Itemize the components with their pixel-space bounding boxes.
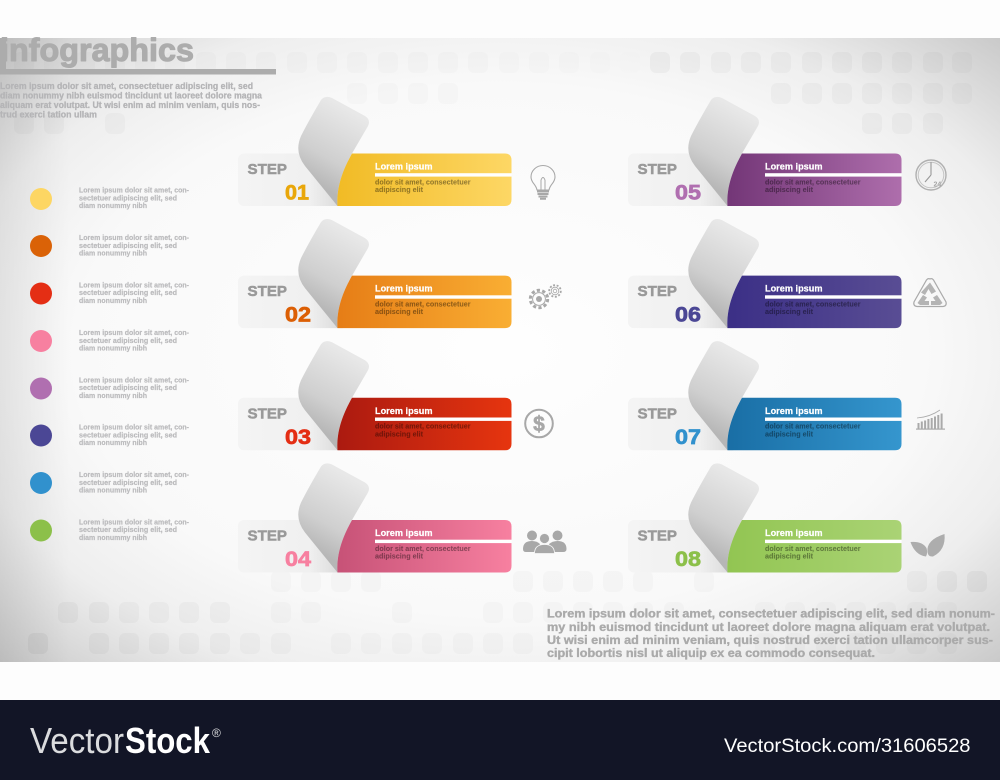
step 07 card: adipiscing elit — [765, 429, 813, 438]
step 02 card — [238, 219, 512, 328]
step 01 card: adipiscing elit — [375, 185, 423, 194]
step 01 card: STEP — [248, 161, 287, 178]
legend item 5 — [30, 375, 189, 400]
step 07 card: STEP — [638, 405, 677, 422]
step 05 card: adipiscing elit — [765, 185, 813, 194]
step 03 card: 03 — [285, 426, 311, 449]
intro paragraph: aliquam erat volutpat. Ut wisi enim ad minim veniam, quis nos- — [0, 100, 260, 111]
legend item 8: Lorem ipsum dolor sit amet, con- — [79, 517, 189, 526]
icon: dollar coin: $ — [533, 413, 545, 436]
gradient panel — [0, 38, 1000, 662]
step 07 card: Lorem ipsum — [765, 406, 822, 417]
legend item 6: Lorem ipsum dolor sit amet, con- — [79, 422, 189, 432]
footer bar — [0, 700, 1000, 780]
legend item 8: sectetuer adipiscing elit, sed — [79, 525, 177, 534]
step 01 card: 01 — [285, 182, 309, 204]
step 01 card: dolor sit amet, consectetuer — [375, 177, 471, 186]
legend item 3: sectetuer adipiscing elit, sed — [79, 288, 177, 297]
legend item 1: sectetuer adipiscing elit, sed — [79, 193, 177, 202]
legend item 5: diam nonummy nibh — [79, 391, 147, 400]
step 04 card: dolor sit amet, consectetuer — [375, 544, 471, 553]
step 04 card: adipiscing elit — [375, 552, 423, 560]
step 08 card — [628, 463, 902, 572]
footer logo: Stock — [125, 720, 211, 761]
bottom paragraph: cipit lobortis nisl ut aliquip ex ea commodo consequat. — [547, 648, 875, 660]
step 05 card: Lorem ipsum — [765, 162, 822, 172]
bottom paragraph: my nibh euismod tincidunt ut laoreet dolore magna aliquam erat volutpat. — [547, 622, 990, 634]
step 08 card: 08 — [675, 548, 701, 571]
footer logo: Vector — [30, 720, 124, 761]
legend — [30, 186, 189, 542]
step 08 card: Lorem ipsum — [765, 528, 822, 539]
icon: 24 hour clock — [916, 160, 946, 190]
step 08 card: adipiscing elit — [765, 552, 813, 560]
step 02 card: dolor sit amet, consectetuer — [375, 299, 471, 308]
step 06 card — [628, 219, 902, 328]
legend item 1: diam nonummy nibh — [79, 201, 147, 210]
icon: gears — [530, 285, 561, 308]
step 03 card: adipiscing elit — [375, 429, 423, 438]
step 07 card — [628, 341, 902, 450]
icon: light bulb — [531, 166, 555, 199]
step 05 card: 05 — [675, 182, 701, 204]
legend item 7 — [30, 470, 189, 494]
step 03 card: STEP — [248, 405, 287, 422]
step 03 card: Lorem ipsum — [375, 406, 432, 417]
step 06 card: dolor sit amet, consectetuer — [765, 299, 861, 308]
step 02 card: Lorem ipsum — [375, 284, 432, 295]
step 07 card: dolor sit amet, consectetuer — [765, 422, 861, 431]
legend item 4: sectetuer adipiscing elit, sed — [79, 336, 177, 345]
title — [0, 32, 276, 74]
intro paragraph: Lorem ipsum dolor sit amet, consectetuer adipiscing elit, sed — [0, 81, 253, 92]
legend item 3: Lorem ipsum dolor sit amet, con- — [79, 280, 189, 289]
intro paragraph: diam nonummy nibh euismod tincidunt ut laoreet dolore magna — [0, 90, 263, 102]
title: infographics — [0, 32, 194, 68]
legend item 3 — [30, 280, 189, 305]
icon: bar chart — [916, 410, 945, 430]
legend item 4 — [30, 328, 189, 352]
step 02 card: 02 — [285, 304, 311, 327]
step 03 card: dolor sit amet, consectetuer — [375, 422, 471, 431]
step 05 card — [628, 97, 902, 206]
footer logo — [30, 720, 221, 761]
step 06 card: Lorem ipsum — [765, 284, 822, 295]
icon: dollar coin — [525, 410, 553, 437]
step 02 card: STEP — [248, 283, 287, 300]
legend item 6: diam nonummy nibh — [79, 438, 147, 447]
background squares: bottom — [28, 571, 987, 654]
step 08 card: dolor sit amet, consectetuer — [765, 544, 861, 553]
icon: leaves — [910, 534, 945, 557]
legend item 1 — [30, 186, 189, 210]
step 06 card: 06 — [675, 304, 701, 327]
bottom paragraph: Ut wisi enim ad minim veniam, quis nostrud exerci tation ullamcorper sus- — [547, 635, 993, 647]
step 07 card: 07 — [675, 426, 701, 449]
footer logo: ® — [212, 726, 221, 740]
legend item 8 — [30, 517, 189, 542]
legend item 2: sectetuer adipiscing elit, sed — [79, 241, 177, 250]
step 04 card: 04 — [285, 548, 311, 571]
legend item 1: Lorem ipsum dolor sit amet, con- — [79, 186, 189, 194]
step 04 card: STEP — [248, 528, 287, 544]
legend item 7: diam nonummy nibh — [79, 486, 147, 494]
background squares: top — [14, 52, 972, 134]
intro paragraph — [0, 81, 263, 120]
bottom paragraph — [547, 609, 995, 660]
legend item 7: sectetuer adipiscing elit, sed — [79, 478, 177, 487]
legend item 2 — [30, 233, 189, 258]
step 06 card: STEP — [638, 283, 677, 300]
icon: 24 hour clock: 24 — [934, 182, 941, 188]
step 04 card — [238, 463, 512, 572]
step 06 card: adipiscing elit — [765, 307, 813, 316]
intro paragraph: trud exerci tation ullam — [0, 110, 97, 120]
step 03 card — [238, 341, 512, 450]
legend item 6: sectetuer adipiscing elit, sed — [79, 430, 177, 439]
step 04 card: Lorem ipsum — [375, 528, 432, 539]
step 08 card: STEP — [638, 528, 677, 544]
legend item 4: Lorem ipsum dolor sit amet, con- — [79, 328, 189, 337]
step 02 card: adipiscing elit — [375, 307, 423, 316]
footer image id: VectorStock.com/31606528 — [724, 736, 970, 757]
legend item 7: Lorem ipsum dolor sit amet, con- — [79, 470, 189, 479]
bottom paragraph: Lorem ipsum dolor sit amet, consectetuer adipiscing elit, sed diam nonum- — [547, 609, 995, 621]
legend item 4: diam nonummy nibh — [79, 344, 147, 352]
step 01 card — [238, 97, 512, 206]
legend item 6 — [30, 422, 189, 447]
step 05 card: dolor sit amet, consectetuer — [765, 177, 861, 186]
icon: recycle triangle — [914, 279, 946, 306]
legend item 8: diam nonummy nibh — [79, 533, 147, 542]
step 05 card: STEP — [638, 161, 677, 178]
legend item 2: Lorem ipsum dolor sit amet, con- — [79, 233, 189, 242]
legend item 5: sectetuer adipiscing elit, sed — [79, 383, 177, 392]
icon: people group — [523, 530, 566, 554]
step 01 card: Lorem ipsum — [375, 162, 432, 172]
legend item 3: diam nonummy nibh — [79, 296, 147, 305]
legend item 2: diam nonummy nibh — [79, 248, 147, 258]
legend item 5: Lorem ipsum dolor sit amet, con- — [79, 375, 189, 384]
